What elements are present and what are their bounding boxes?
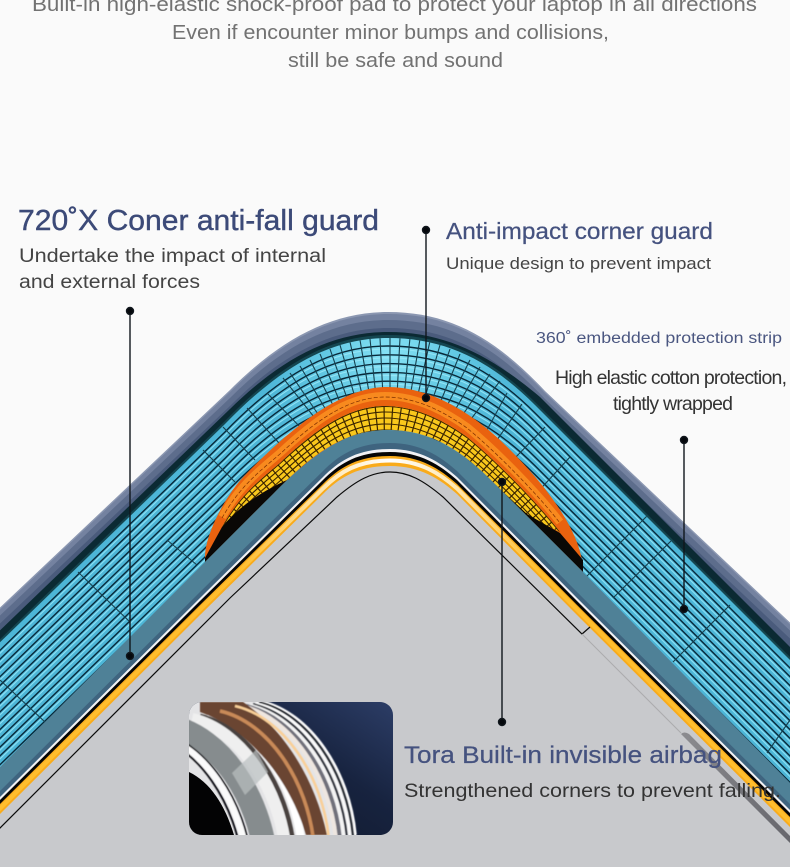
orange embedded strip: [0, 456, 790, 862]
callout leader: anti-impact: [422, 226, 430, 402]
intro text block: Even if encounter minor bumps and collisions,: [172, 22, 609, 44]
label: anti-impact corner guard: Anti-impact corner guard: [446, 218, 713, 244]
intro text block: [32, 0, 757, 72]
label: high elastic cotton: High elastic cotton protection,: [555, 367, 787, 389]
outer navy shell: [0, 312, 790, 866]
description: corner guard: Undertake the impact of internal: [19, 246, 326, 267]
black wedges under airbag: [205, 480, 583, 572]
label: tora built-in invisible airbag: Tora Built-in invisible airbag: [404, 742, 722, 769]
grey metal edge strip: [681, 732, 790, 843]
intro text block: still be safe and sound: [288, 50, 503, 72]
label: anti-impact corner guard: [446, 218, 713, 273]
label: anti-impact corner guard: Unique design to prevent impact: [446, 254, 711, 273]
white and black edge lines: [0, 449, 790, 853]
inset photo: metal corner close-up: [189, 702, 393, 835]
label: high elastic cotton: [555, 367, 787, 415]
inner grey laptop area: [0, 466, 790, 867]
label: tora built-in invisible airbag: [404, 742, 781, 802]
callout leader: corner guard: [126, 308, 134, 660]
airbag: orange layer: [205, 387, 583, 572]
corner guard cross-section diagram: [0, 312, 790, 867]
callout leader: high elastic cotton: [680, 436, 688, 612]
description: corner guard: and external forces: [19, 272, 200, 293]
callout leader: airbag: [498, 478, 506, 726]
label: high elastic cotton: tightly wrapped: [613, 393, 733, 415]
blue cushion with mesh: [0, 338, 790, 782]
description: corner guard: [19, 246, 326, 293]
dark inner lining: [0, 332, 790, 850]
heading: 720 X corner guard: 720˚X Coner anti-fall guard: [18, 205, 379, 237]
heading: 720 X corner guard: [18, 205, 379, 293]
teal protection band: [0, 430, 790, 850]
label: 360 embedded protection strip: 360˚ embedded protection strip: [536, 330, 782, 347]
label: tora built-in invisible airbag: Strengthened corners to prevent falling.: [404, 780, 781, 802]
airbag: yellow mesh layer: [222, 406, 560, 532]
